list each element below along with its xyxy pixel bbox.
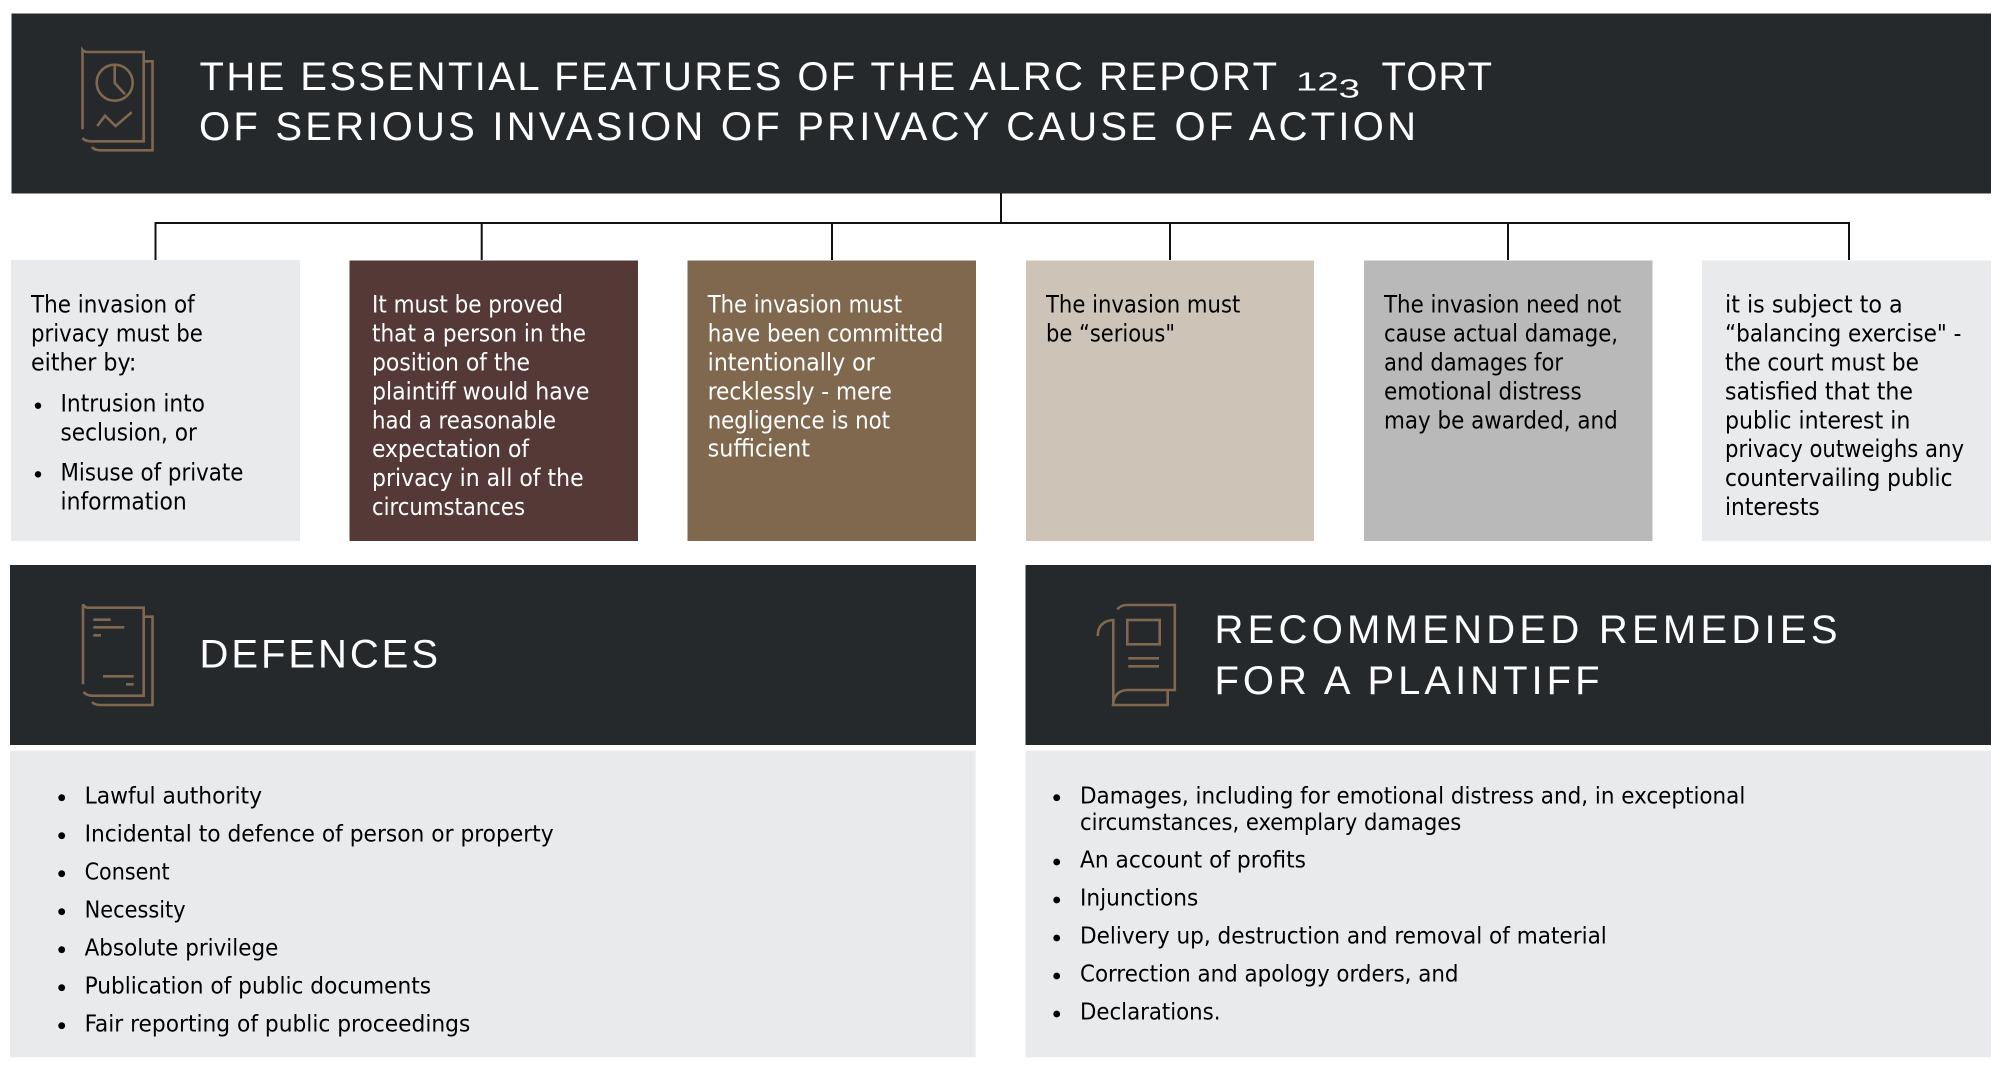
panel: invasion either by: seclusion, or	[60, 419, 197, 447]
panel: remedies list: An account of profits	[1080, 848, 1306, 874]
panel: invasion either by: Misuse of private	[60, 458, 243, 486]
panel: balancing exercise: satisfied that the	[1725, 377, 1913, 405]
panel: actual damage	[1364, 260, 1652, 541]
panel: invasion either by: Intrusion into	[60, 390, 205, 418]
panel: remedies list: Damages, including for emotional distress and, in exceptional	[1080, 783, 1745, 809]
panel: serious: The invasion must	[1045, 291, 1240, 319]
panel: actual damage: and damages for	[1384, 348, 1563, 376]
panel: invasion either by: information	[60, 487, 187, 515]
panel: reasonable expectation: It must be proved	[372, 291, 563, 319]
title text	[199, 55, 1492, 149]
panel: balancing exercise: public interest in	[1725, 406, 1910, 434]
panel: actual damage: cause actual damage,	[1384, 320, 1618, 348]
panel: defences list: Absolute privilege	[85, 935, 278, 961]
panel: reasonable expectation: expectation of	[372, 435, 530, 463]
panel: defences header	[10, 565, 976, 745]
panel: actual damage: The invasion need not	[1383, 291, 1621, 319]
panel: intentional or reckless: The invasion must	[707, 291, 902, 319]
title text: 3	[1339, 74, 1360, 104]
panel: reasonable expectation: plaintiff would have	[372, 377, 589, 405]
icon: book	[1098, 605, 1175, 705]
panel: serious	[1026, 260, 1314, 541]
panel: remedies list: Declarations.	[1080, 1000, 1220, 1026]
panel: remedies list	[1026, 751, 1991, 1057]
panel: remedies list: Delivery up, destruction and removal of material	[1080, 924, 1607, 950]
panel: actual damage: may be awarded, and	[1384, 406, 1618, 434]
panel: balancing exercise: it is subject to a	[1725, 291, 1903, 319]
panel: invasion either by: The invasion of	[30, 291, 196, 319]
panel: balancing exercise: privacy outweighs any	[1725, 435, 1964, 463]
panel: intentional or reckless: recklessly - mere	[708, 377, 892, 405]
panel: remedies list: Injunctions	[1080, 886, 1198, 912]
panel: defences list: Lawful authority	[85, 783, 262, 809]
title text: OF SERIOUS INVASION OF PRIVACY CAUSE OF ACTION	[199, 105, 1416, 149]
panel: reasonable expectation: position of the	[372, 348, 530, 376]
panel: remedies header	[1026, 565, 1991, 745]
panel: defences list: Fair reporting of public proceedings	[85, 1012, 470, 1038]
panel: intentional or reckless: intentionally or	[708, 348, 875, 376]
icon: report with pie chart	[82, 50, 152, 150]
heading: recommended remedies: FOR A PLAINTIFF	[1214, 659, 1600, 703]
panel: balancing exercise: interests	[1725, 493, 1820, 521]
panel: remedies list: circumstances, exemplary damages	[1080, 810, 1461, 836]
title text: TORT	[1382, 55, 1492, 99]
panel: balancing exercise: the court must be	[1725, 348, 1919, 376]
panel: invasion either by: privacy must be	[31, 320, 203, 348]
connector lines	[156, 193, 1849, 260]
panel: reasonable expectation: circumstances	[372, 493, 525, 521]
panel: defences list: Necessity	[85, 897, 186, 923]
panel: defences list	[10, 751, 976, 1057]
icon: document pages	[83, 604, 152, 705]
panel: intentional or reckless	[688, 260, 976, 541]
panel: invasion either by	[11, 260, 300, 541]
panel: remedies list: Correction and apology orders, and	[1080, 962, 1458, 988]
panel: reasonable expectation	[350, 260, 638, 541]
panel: defences list: Consent	[85, 859, 170, 885]
title text: 12	[1296, 66, 1325, 96]
panel: reasonable expectation: that a person in the	[372, 320, 586, 348]
panel: reasonable expectation: privacy in all of the	[372, 464, 584, 492]
panel: invasion either by: either by:	[31, 349, 136, 377]
heading: defences: DEFENCES	[200, 632, 438, 676]
heading: recommended remedies	[1214, 608, 1838, 703]
panel: balancing exercise	[1702, 260, 1991, 541]
panel: balancing exercise: countervailing public	[1725, 464, 1952, 492]
panel: defences list: Publication of public documents	[85, 973, 431, 999]
panel: intentional or reckless: have been committed	[708, 320, 943, 348]
panel: intentional or reckless: negligence is not	[708, 406, 890, 434]
panel: defences list: Incidental to defence of person or property	[85, 821, 554, 847]
panel: serious: be “serious"	[1046, 320, 1175, 348]
panel: reasonable expectation: had a reasonable	[372, 406, 556, 434]
panel: title banner	[12, 14, 1991, 194]
panel: intentional or reckless: sufficient	[708, 435, 810, 463]
panel: actual damage: emotional distress	[1384, 377, 1582, 405]
title text: THE ESSENTIAL FEATURES OF THE ALRC REPORT	[200, 55, 1277, 99]
heading: recommended remedies: RECOMMENDED REMEDIES	[1214, 608, 1838, 652]
panel: balancing exercise: “balancing exercise" -	[1725, 320, 1961, 348]
